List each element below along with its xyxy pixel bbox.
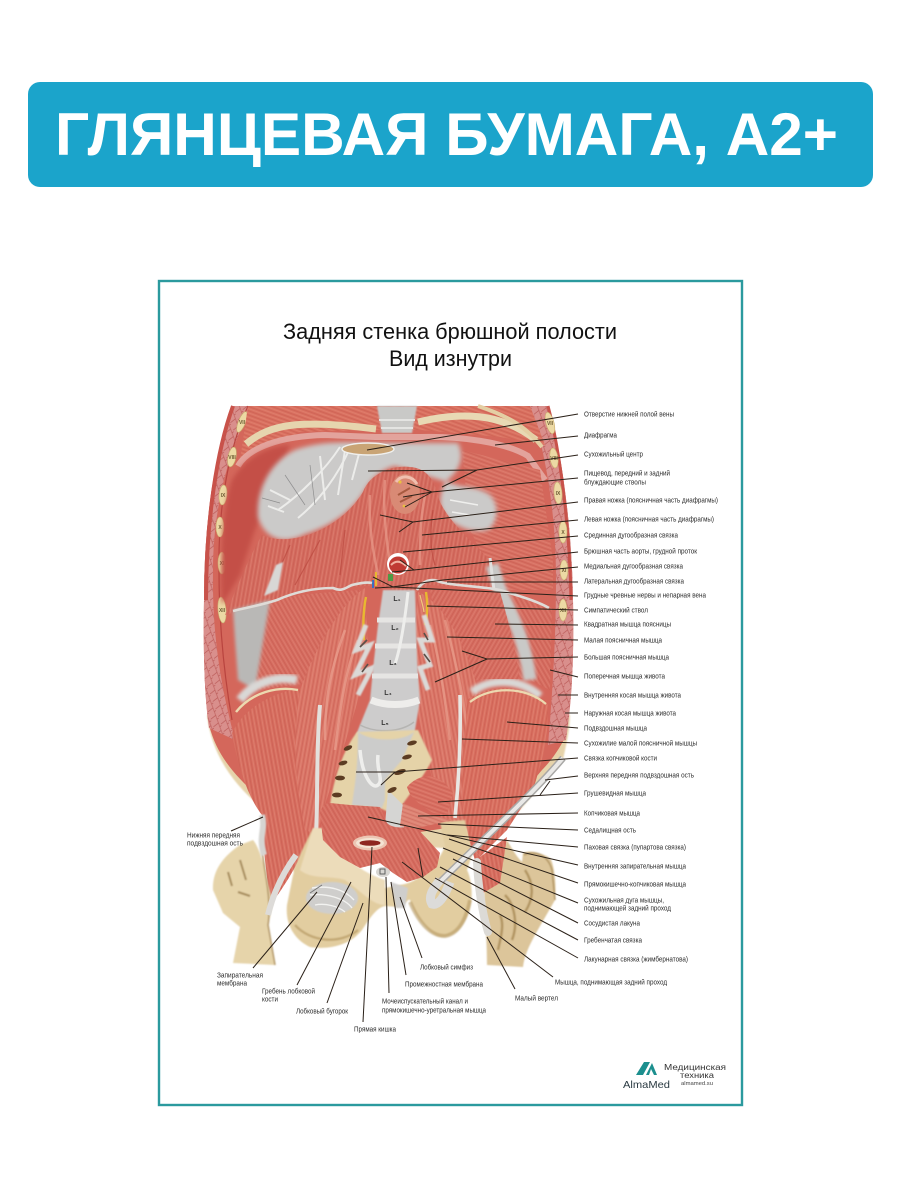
labels: lower and left: Лобковый симфиз	[420, 964, 473, 972]
labels: lower and left: Малый вертел	[515, 994, 558, 1002]
labels: right column: Наружная косая мышца живота	[584, 710, 676, 718]
labels: lower and left: Прямая кишка	[354, 1026, 396, 1034]
pelvic floor muscles	[320, 803, 453, 882]
vertebra labels: L₂	[391, 625, 399, 632]
hip bones	[287, 820, 472, 948]
logo mark	[636, 1062, 657, 1075]
central tendon	[258, 442, 497, 540]
labels: right column: Связка копчиковой кости	[584, 754, 657, 762]
anatomy illustration	[204, 406, 578, 1022]
labels: right column: Сухожильная дуга мышцы,	[584, 898, 664, 904]
labels: right column: Грушевидная мышца	[584, 790, 646, 798]
abdominal wall left	[204, 406, 252, 740]
labels: right column: Внутренняя запирательная мышца	[584, 864, 686, 870]
AlmaMed logo: AlmaMed	[623, 1079, 670, 1091]
labels: right column: Латеральная дугообразная связка	[584, 578, 684, 586]
rib cartilage ovals	[216, 410, 568, 623]
rib numerals: XII	[560, 608, 567, 614]
labels: lower and left: Лобковый бугорок	[296, 1008, 349, 1016]
labels: right column: Прямокишечно-копчиковая мышца	[584, 882, 686, 888]
vertebra labels: L₁	[393, 596, 401, 603]
urethra	[376, 867, 390, 877]
rib numerals: IX	[221, 493, 226, 499]
lumbar spine	[355, 590, 432, 740]
labels: right column	[584, 410, 718, 964]
banner	[28, 82, 873, 187]
rib numerals	[218, 420, 567, 614]
labels: lower and left: Промежностная мембрана	[405, 980, 483, 988]
obturator membrane	[306, 882, 358, 914]
labels: right column: Подвздошная мышца	[584, 726, 647, 732]
right psoas major	[415, 592, 478, 830]
vertebra labels: L₃	[389, 660, 397, 667]
rib numerals: XI	[220, 561, 225, 567]
labels: right column: Верхняя передняя подвздошная ость	[584, 772, 694, 780]
AlmaMed logo: almamed.su	[681, 1081, 713, 1087]
labels: right column: Внутренняя косая мышца живота	[584, 692, 681, 700]
diaphragm pale edge	[238, 435, 545, 480]
labels: right column: Срединная дугообразная связка	[584, 532, 678, 540]
right lower iliopsoas	[470, 837, 507, 932]
poster title: Вид изнутри	[389, 346, 512, 371]
vertebra labels: L₅	[381, 720, 389, 727]
transversus and lateral muscle	[490, 558, 552, 690]
labels: right column: Гребенчатая связка	[584, 936, 642, 944]
labels: lower and left: Гребень лобковой	[262, 988, 315, 996]
rib numerals: VII	[239, 420, 246, 426]
labels: right column: Грудные чревные нервы и непарная вена	[584, 592, 706, 600]
sympathetic trunks	[363, 592, 427, 640]
labels: right column: Симпатический ствол	[584, 606, 648, 614]
banner heading: ГЛЯНЦЕВАЯ БУМАГА, А2+	[55, 101, 838, 168]
inguinal ligament	[430, 758, 563, 904]
labels: lower and left: Нижняя передняя	[187, 832, 240, 840]
labels: right column: Брюшная часть аорты, грудной проток	[584, 548, 698, 556]
labels: right column: Диафрагма	[584, 432, 617, 440]
arcuate ligaments	[233, 580, 549, 611]
left femur	[213, 815, 275, 965]
psoas minor tendon right	[455, 695, 460, 818]
upper ribs and intercostals	[240, 406, 545, 460]
labels: right column: Сухожилие малой поясничной мышцы	[584, 740, 697, 748]
left iliacus	[232, 679, 318, 905]
labels: right column: поднимающей задний проход	[584, 904, 671, 912]
vertebra labels	[381, 596, 401, 727]
left psoas major	[296, 588, 368, 835]
rib numerals: VIII	[228, 455, 236, 461]
rib numerals: X	[561, 530, 565, 536]
quadratus lumborum	[233, 590, 520, 690]
labels: right column: Малая поясничная мышца	[584, 638, 662, 644]
oesophagus opening	[390, 474, 420, 514]
poster frame	[159, 281, 742, 1105]
piriformis	[407, 776, 453, 815]
labels: right column: Медиальная дугообразная связка	[584, 562, 683, 570]
diaphragm right dome	[462, 450, 553, 590]
labels: lower and left: подвздошная ость	[187, 840, 243, 848]
labels: right column: Левая ножка (поясничная часть диафрагмы)	[584, 516, 714, 524]
torso muscle base	[204, 406, 573, 850]
AlmaMed logo: техника	[680, 1070, 714, 1080]
right femur	[484, 840, 556, 967]
labels: right column: Лакунарная связка (жимбернатова)	[584, 956, 688, 964]
aortic opening	[372, 553, 409, 588]
labels: right column: Пищевод, передний и задний	[584, 470, 670, 478]
rib numerals: XI	[562, 568, 567, 574]
labels: right column: Правая ножка (поясничная часть диафрагмы)	[584, 498, 718, 504]
rib numerals: IX	[556, 491, 561, 497]
right iliacus	[462, 682, 548, 857]
diaphragm left dome shade	[221, 445, 290, 605]
labels: right column: Большая поясничная мышца	[584, 654, 669, 662]
labels: lower and left: Мышца, поднимающая задний проход	[555, 978, 667, 986]
leader lines	[231, 414, 578, 1022]
labels: right column: Седалищная ость	[584, 828, 636, 834]
left iliopsoas tendon	[268, 855, 296, 915]
labels: lower and left: Мочеиспускательный канал и	[382, 998, 468, 1006]
poster title: Задняя стенка брюшной полости	[283, 319, 617, 344]
labels: right column: Копчиковая мышца	[584, 810, 640, 818]
sacrum	[330, 730, 432, 835]
vertebra labels: L₄	[384, 690, 392, 697]
AlmaMed logo	[623, 1062, 726, 1091]
labels: right column: Квадратная мышца поясницы	[584, 622, 671, 628]
labels: right column: Сосудистая лакуна	[584, 920, 640, 928]
abdominal wall right	[530, 406, 573, 745]
labels: right column: Сухожильный центр	[584, 450, 643, 458]
anal canal opening	[353, 836, 387, 850]
diaphragm crura	[225, 467, 505, 615]
labels: right column: Поперечная мышца живота	[584, 674, 665, 680]
labels: right column: Паховая связка (пупартова связка)	[584, 844, 686, 852]
labels: lower and left: кости	[262, 996, 278, 1004]
labels: lower and left: мембрана	[217, 980, 247, 988]
iliac crest and hip bone background	[207, 715, 570, 880]
labels: lower and left	[187, 832, 667, 1034]
rib numerals: VII	[547, 421, 554, 427]
rib numerals: X	[218, 525, 222, 531]
labels: right column: блуждающие стволы	[584, 478, 646, 486]
labels: lower and left: Запирательная	[217, 972, 263, 980]
pubic symphysis	[391, 882, 408, 908]
rib numerals: VIII	[550, 456, 558, 462]
poster title	[283, 319, 617, 371]
labels: right column: Отверстие нижней полой вены	[584, 410, 674, 418]
labels: lower and left: прямокишечно-уретральная мышца	[382, 1008, 486, 1014]
AlmaMed logo: Медицинская	[664, 1062, 726, 1072]
rib numerals: XII	[219, 608, 226, 614]
sacral foramina	[332, 740, 417, 797]
